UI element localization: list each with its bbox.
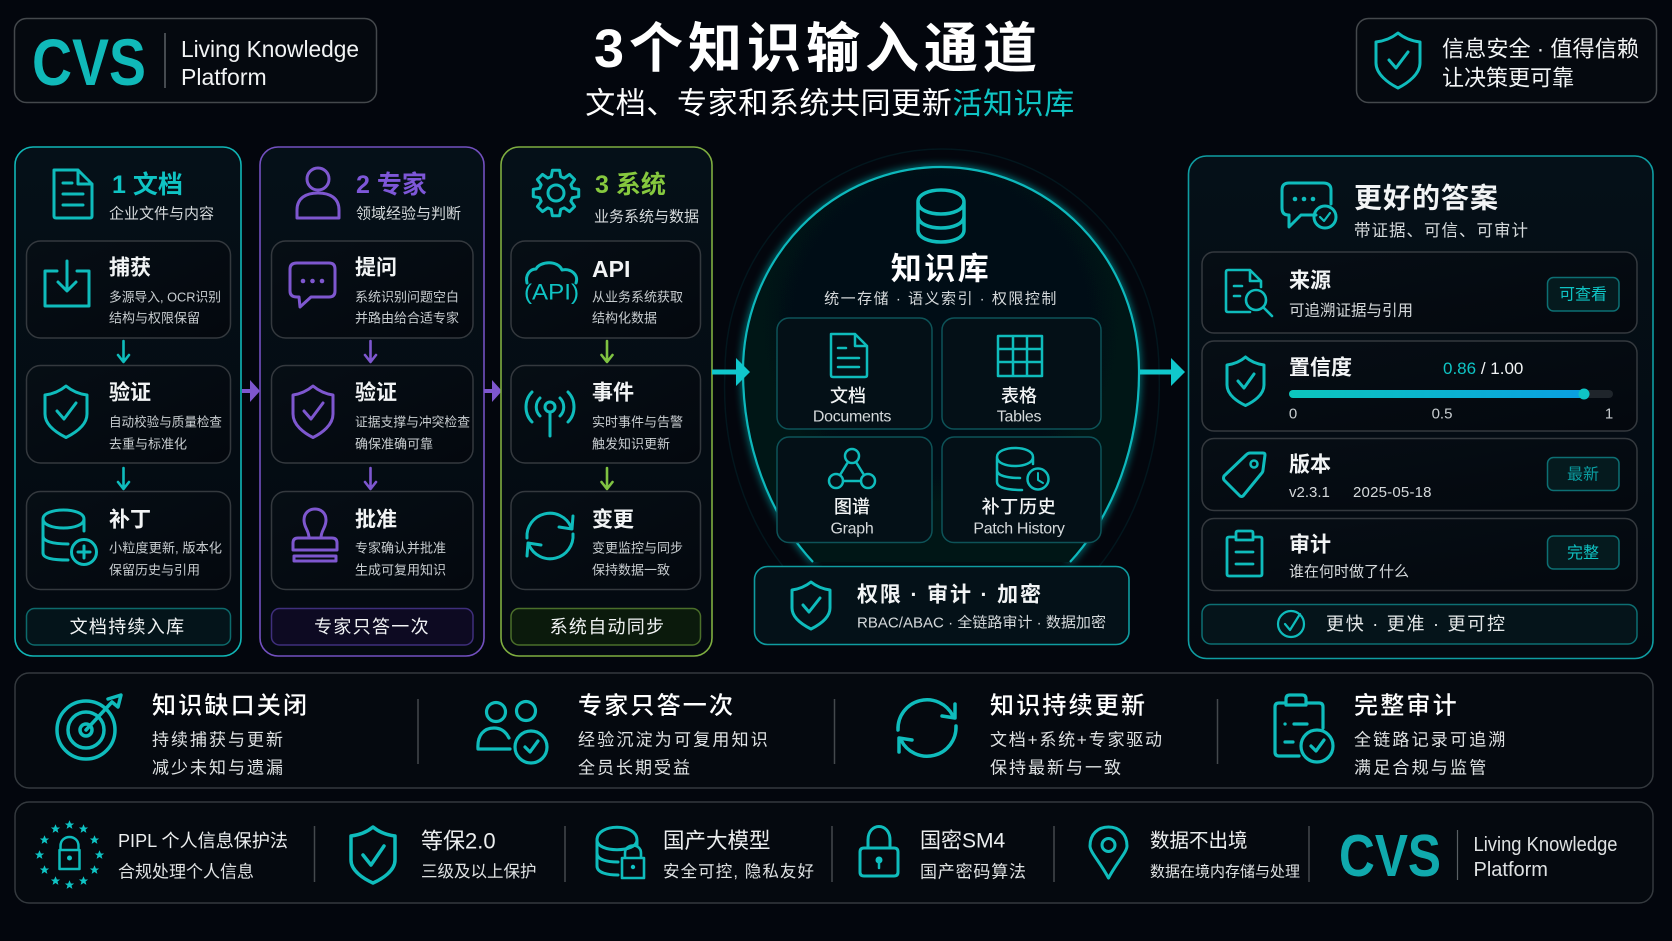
card: 提问: 并路由给合适专家 <box>355 310 459 326</box>
outcome: 专家只答一次: 经验沉淀为可复用知识 <box>578 730 770 750</box>
card: 验证 <box>26 366 230 463</box>
heading: 权限 · 审计 · 加密 <box>857 582 1041 606</box>
card: 验证: 验证 <box>109 380 151 404</box>
card: 事件 <box>511 366 700 463</box>
card: 版本: 2025-05-18 <box>1353 484 1432 501</box>
outcome: 知识缺口关闭: 知识缺口关闭 <box>152 692 309 720</box>
card: 文档 <box>777 318 932 429</box>
item: 国产大模型: 国产大模型 <box>663 829 771 853</box>
card: 提问: 提问 <box>355 256 397 280</box>
outcome: 知识缺口关闭: 持续捕获与更新 <box>152 730 285 750</box>
panel: 2 专家 <box>260 147 484 656</box>
item: 数据不出境 <box>1090 827 1300 880</box>
card: 变更: 保持数据一致 <box>592 562 670 578</box>
security box <box>754 566 1129 644</box>
card: 验证: 证据支撑与冲突检查 <box>355 414 470 430</box>
logo badge top left: Platform <box>181 64 267 90</box>
logo bottom right <box>1339 823 1618 889</box>
arrow: 专家 to 系统 <box>484 380 502 402</box>
card: 批准: 专家确认并批准 <box>355 540 446 556</box>
card: API: API <box>592 256 630 282</box>
footer tag: 文档持续入库 <box>70 617 185 637</box>
card: 来源: 来源 <box>1289 270 1331 292</box>
card: 文档: 文档 <box>830 386 866 406</box>
outcome: 完整审计 <box>1275 692 1508 778</box>
card: 补丁: 补丁 <box>109 508 151 532</box>
footer tag: 系统自动同步 <box>550 617 665 637</box>
outcome: 知识持续更新 <box>898 692 1164 778</box>
card: 审计: 完整 <box>1567 544 1599 562</box>
card: 批准 <box>272 492 473 590</box>
logo bottom right: Platform <box>1474 859 1548 881</box>
card: 验证: 自动校验与质量检查 <box>109 414 222 430</box>
item: 国密SM4 <box>860 826 1027 882</box>
card: 文档: Documents <box>813 408 891 426</box>
card: 捕获: 捕获 <box>109 256 151 280</box>
footer tag <box>272 608 473 645</box>
icon: gear <box>533 170 579 216</box>
item: 国密SM4: 国密SM4 <box>920 830 1005 852</box>
item: PIPL <box>35 820 288 889</box>
item: PIPL: 合规处理个人信息 <box>118 862 254 882</box>
outcome: 专家只答一次: 全员长期受益 <box>578 758 692 778</box>
outcome: 知识持续更新: 保持最新与一致 <box>990 758 1123 778</box>
card: 审计: 审计 <box>1289 532 1331 556</box>
card: 事件: 事件 <box>592 380 634 404</box>
card: 置信度: 0.5 <box>1432 406 1452 422</box>
card: 验证: 去重与标准化 <box>109 436 187 452</box>
card: 变更 <box>511 492 700 590</box>
outcome: 完整审计: 完整审计 <box>1354 692 1459 720</box>
arrow: 知识库 to 答案 <box>1140 358 1185 386</box>
outcome: 知识持续更新: 知识持续更新 <box>990 692 1147 720</box>
panel: 3 系统 <box>501 147 712 656</box>
logo bottom right: CVS <box>1339 823 1441 889</box>
item: 国产大模型: 安全可控, 隐私友好 <box>663 862 814 881</box>
card: 置信度: 置信度 <box>1289 356 1352 380</box>
icon: shield <box>792 582 830 629</box>
outcome: 完整审计: 全链路记录可追溯 <box>1354 730 1508 750</box>
trust badge top right <box>1356 18 1656 102</box>
logo badge top left <box>14 18 376 102</box>
subheading: 统一存储 · 语义索引 · 权限控制 <box>824 290 1058 308</box>
card: 事件: 触发知识更新 <box>592 436 670 452</box>
card: 表格 <box>942 318 1101 429</box>
card: 补丁: 小粒度更新, 版本化 <box>109 540 222 556</box>
subheading: 业务系统与数据 <box>594 208 699 226</box>
outcome: 知识缺口关闭 <box>57 692 309 778</box>
footer: 更快 更准 更可控 <box>1202 604 1637 644</box>
card: 验证 <box>272 366 473 463</box>
card: 补丁: 保留历史与引用 <box>109 562 200 578</box>
card: 变更: 变更 <box>592 508 634 532</box>
panel: outcomes row <box>15 673 1653 788</box>
card: 捕获 <box>26 241 230 338</box>
card: 版本 <box>1202 438 1637 510</box>
item: 数据不出境: 数据在境内存储与处理 <box>1150 862 1300 880</box>
card: 来源 <box>1202 252 1637 333</box>
icon: database <box>918 190 964 242</box>
item: 等保2.0: 三级及以上保护 <box>421 862 536 881</box>
card: API: 从业务系统获取 <box>592 290 683 304</box>
trust badge top right: 信息安全 · 值得信赖 <box>1442 36 1639 62</box>
logo badge top left: CVS <box>32 25 146 99</box>
card: 批准: 生成可复用知识 <box>355 562 446 578</box>
card: API <box>511 241 700 338</box>
outcome: 专家只答一次 <box>478 692 770 778</box>
card: 补丁历史 <box>942 437 1101 542</box>
card: 提问: 系统识别问题空白 <box>355 290 459 304</box>
card: 批准: 批准 <box>355 508 397 532</box>
card: API: (API) <box>524 280 579 304</box>
heading: 2 专家: 2 专家 <box>356 171 427 199</box>
card: 置信度: 0.86 / 1.00 <box>1443 358 1523 378</box>
card: 审计 <box>1202 518 1637 590</box>
card: 变更: 变更监控与同步 <box>592 540 683 556</box>
card: 表格: Tables <box>997 408 1042 426</box>
panel: 知识库 dome <box>725 149 1159 575</box>
arrow down <box>118 341 129 362</box>
outcome: 完整审计: 满足合规与监管 <box>1354 758 1488 778</box>
card: 审计: 谁在何时做了什么 <box>1289 564 1409 580</box>
card: 置信度 <box>1202 341 1637 431</box>
footer tag <box>26 608 230 645</box>
card: 版本: v2.3.1 <box>1289 484 1330 501</box>
arrow: 系统 to 知识库 <box>712 358 750 386</box>
card: 版本: 最新 <box>1567 466 1599 484</box>
item: 国密SM4: 国产密码算法 <box>920 862 1027 882</box>
card: 图谱: 图谱 <box>834 497 870 517</box>
subheading: 领域经验与判断 <box>356 206 461 222</box>
title: 3个知识输入通道 <box>594 19 1042 79</box>
card: 来源: 可查看 <box>1559 286 1607 304</box>
heading: 3 系统: 3 系统 <box>595 171 666 199</box>
item: 等保2.0 <box>351 827 536 883</box>
logo bottom right: Living Knowledge <box>1474 834 1618 856</box>
logo badge top left: Living Knowledge <box>181 36 359 62</box>
card: 表格: 表格 <box>1001 386 1037 406</box>
card: 验证: 确保准确可靠 <box>355 436 433 452</box>
outcome: 知识缺口关闭: 减少未知与遗漏 <box>152 758 285 778</box>
outcome: 知识持续更新: 文档+系统+专家驱动 <box>990 730 1164 750</box>
item: PIPL: PIPL 个人信息保护法 <box>118 831 288 851</box>
card: 补丁历史: Patch History <box>973 520 1065 538</box>
panel: compliance row <box>15 802 1653 903</box>
icon: chat check <box>1282 183 1331 227</box>
item: 国产大模型 <box>597 827 814 881</box>
card: 验证: 验证 <box>355 380 397 404</box>
arrow down <box>365 341 376 362</box>
trust badge top right: 让决策更可靠 <box>1442 66 1574 90</box>
footer tag <box>511 608 700 645</box>
progress bar <box>1289 388 1613 400</box>
card: 来源: 可追溯证据与引用 <box>1289 302 1413 320</box>
heading: 1 文档: 1 文档 <box>112 171 183 199</box>
subtitle: 文档、专家和系统共同更新活知识库 <box>585 88 1075 120</box>
panel: 1 文档 <box>15 147 241 656</box>
card: 版本: 版本 <box>1289 454 1331 476</box>
arrow down <box>118 468 129 489</box>
footer tag: 专家只答一次 <box>314 617 430 637</box>
arrow: 文档 to 专家 <box>242 380 260 402</box>
card: 置信度: 0 <box>1289 406 1297 422</box>
item: 数据不出境: 数据不出境 <box>1150 830 1248 852</box>
arrow down <box>365 468 376 489</box>
card: 置信度: 1 <box>1605 406 1613 422</box>
card: API: 结构化数据 <box>592 310 657 326</box>
card: 图谱: Graph <box>831 520 873 538</box>
item: 等保2.0: 等保2.0 <box>421 828 496 854</box>
icon: person <box>297 168 339 218</box>
outcome: 专家只答一次: 专家只答一次 <box>578 692 735 720</box>
panel: 更好的答案 <box>1188 156 1653 658</box>
heading: 知识库: 知识库 <box>891 252 991 286</box>
card: 补丁历史: 补丁历史 <box>982 497 1056 517</box>
card: 提问 <box>272 241 473 338</box>
card: 图谱 <box>777 437 932 542</box>
footer: 更快 更准 更可控: 更快 · 更准 · 更可控 <box>1326 614 1505 634</box>
card: 捕获: 结构与权限保留 <box>109 310 200 326</box>
card: 捕获: 多源导入, OCR识别 <box>109 290 221 304</box>
caption: RBAC/ABAC · 全链路审计 · 数据加密 <box>857 614 1106 632</box>
icon: document <box>54 170 92 218</box>
heading: 更好的答案 <box>1354 182 1499 214</box>
subheading: 企业文件与内容 <box>109 204 214 222</box>
arrow down <box>602 341 612 362</box>
card: 事件: 实时事件与告警 <box>592 414 683 430</box>
card: 补丁 <box>26 492 230 590</box>
subheading: 带证据、可信、可审计 <box>1354 221 1529 240</box>
arrow down <box>602 468 612 489</box>
